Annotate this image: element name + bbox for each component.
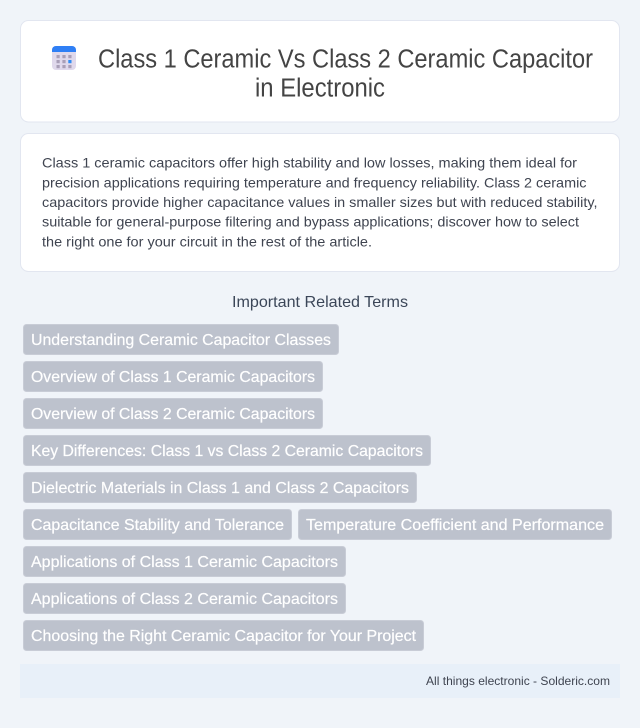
title: in Electronic: [255, 74, 385, 102]
tag 9: [24, 584, 346, 614]
summary text: [42, 154, 598, 249]
tag 10: [24, 620, 424, 650]
footer text: All things electronic - Solderic.com: [426, 674, 610, 688]
tag 1: Understanding Ceramic Capacitor Classes: [31, 332, 331, 349]
tag 4: Key Differences: Class 1 vs Class 2 Ceramic Capacitors: [31, 443, 423, 460]
tag 8: Applications of Class 1 Ceramic Capacitors: [31, 554, 338, 571]
tag 8: [24, 546, 346, 576]
tag 2: [24, 362, 322, 392]
title: [98, 46, 593, 102]
summary text: capacitors provide higher capacitance values in smaller sizes but with reduced stability,: [42, 194, 598, 210]
summary text: the right one for your circuit in the rest of the article.: [42, 233, 372, 249]
tag 10: Choosing the Right Ceramic Capacitor for Your Project: [31, 628, 417, 645]
tag 7: Temperature Coefficient and Performance: [306, 517, 604, 534]
summary panel: [20, 134, 620, 272]
tag 6: Capacitance Stability and Tolerance: [31, 517, 284, 534]
title: Class 1 Ceramic Vs Class 2 Ceramic Capacitor: [98, 46, 593, 74]
tag 7: [298, 510, 612, 540]
tag 6: [24, 510, 292, 540]
tag 9: Applications of Class 2 Ceramic Capacitors: [31, 591, 338, 608]
summary text: suitable for general-purpose filtering and bypass applications; discover how to select: [42, 214, 579, 230]
icon: calendar: [52, 46, 76, 70]
term tags: [24, 324, 612, 650]
tag 2: Overview of Class 1 Ceramic Capacitors: [31, 369, 315, 386]
tag 5: Dielectric Materials in Class 1 and Class 2 Capacitors: [31, 480, 409, 497]
summary text: precision applications requiring temperature and frequency reliability. Class 2 ceramic: [42, 174, 586, 190]
tag 3: [24, 398, 322, 428]
footer bar: [20, 664, 620, 698]
tag 1: [24, 324, 338, 354]
summary text: Class 1 ceramic capacitors offer high stability and low losses, making them ideal for: [42, 154, 577, 170]
tag 5: [24, 472, 416, 502]
header panel: [20, 20, 620, 122]
heading: important related terms: Important Related Terms: [232, 294, 408, 311]
tag 4: [24, 436, 430, 466]
tag 3: Overview of Class 2 Ceramic Capacitors: [31, 406, 315, 423]
